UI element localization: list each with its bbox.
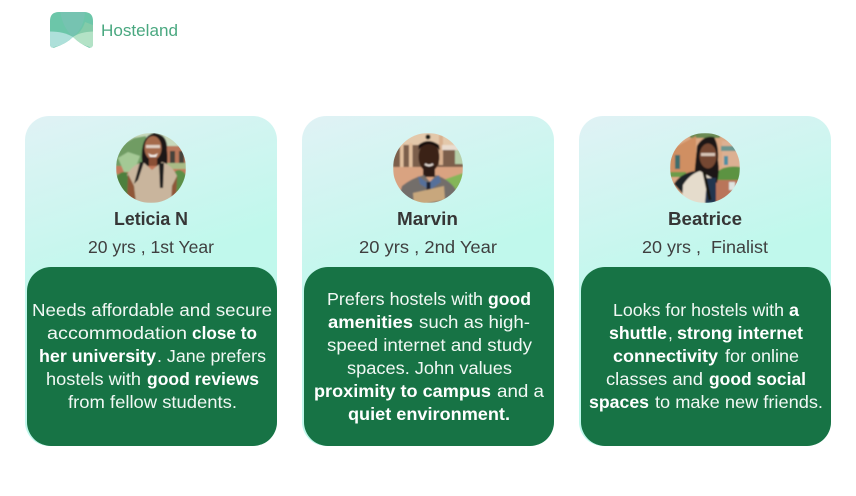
description text: for online — [725, 346, 799, 366]
description text: Prefers hostels with — [327, 289, 483, 309]
description text: Looks for hostels with — [613, 300, 784, 320]
description text: and a — [497, 381, 544, 401]
description text: accommodation — [47, 323, 187, 343]
description text — [589, 300, 823, 412]
description text: good social — [709, 369, 806, 389]
panel: Leticia N — [25, 116, 277, 446]
name: Beatrice — [668, 209, 742, 229]
description text: proximity to campus — [314, 381, 491, 401]
description text: from fellow students. — [68, 392, 237, 412]
card background — [579, 116, 831, 446]
age and year: 20 yrs , 2nd Year — [359, 237, 497, 257]
description text — [314, 289, 544, 424]
description text: close to — [192, 323, 257, 343]
description panel — [581, 267, 831, 446]
description text: spaces. John values — [347, 358, 512, 378]
panel: Beatrice — [579, 116, 831, 446]
description text: . Jane prefers — [157, 346, 266, 366]
description text: such as high- — [419, 312, 530, 332]
logo wordmark: Hosteland — [101, 22, 178, 40]
description text: good reviews — [147, 369, 259, 389]
name: Leticia N — [114, 209, 188, 229]
description text: classes and — [606, 369, 703, 389]
age and year: 20 yrs , Finalist — [642, 237, 768, 257]
description text: strong internet — [677, 323, 803, 343]
description text: good — [488, 289, 531, 309]
avatar photo: Marvin — [393, 133, 463, 205]
description panel — [304, 267, 554, 446]
description text: to make new friends. — [655, 392, 823, 412]
card background — [302, 116, 554, 446]
card background — [25, 116, 277, 446]
icon: Hosteland mark — [50, 10, 93, 48]
description text: amenities — [328, 312, 413, 332]
description text: , — [668, 323, 673, 343]
description text: connectivity — [613, 346, 718, 366]
avatar photo: Leticia — [115, 133, 187, 203]
panel: Marvin — [302, 116, 554, 446]
description text: a — [789, 300, 799, 320]
description text: hostels with — [46, 369, 141, 389]
description text: spaces — [589, 392, 649, 412]
name: Marvin — [397, 209, 458, 229]
age and year: 20 yrs , 1st Year — [88, 237, 214, 257]
logo — [50, 10, 178, 48]
description panel — [27, 267, 277, 446]
description text: her university — [39, 346, 156, 366]
description text: Needs affordable and secure — [32, 300, 272, 320]
description text: shuttle — [609, 323, 667, 343]
description text: speed internet and study — [327, 335, 532, 355]
description text — [32, 300, 272, 412]
description text: quiet environment. — [348, 404, 510, 424]
avatar photo: Beatrice — [670, 133, 740, 203]
